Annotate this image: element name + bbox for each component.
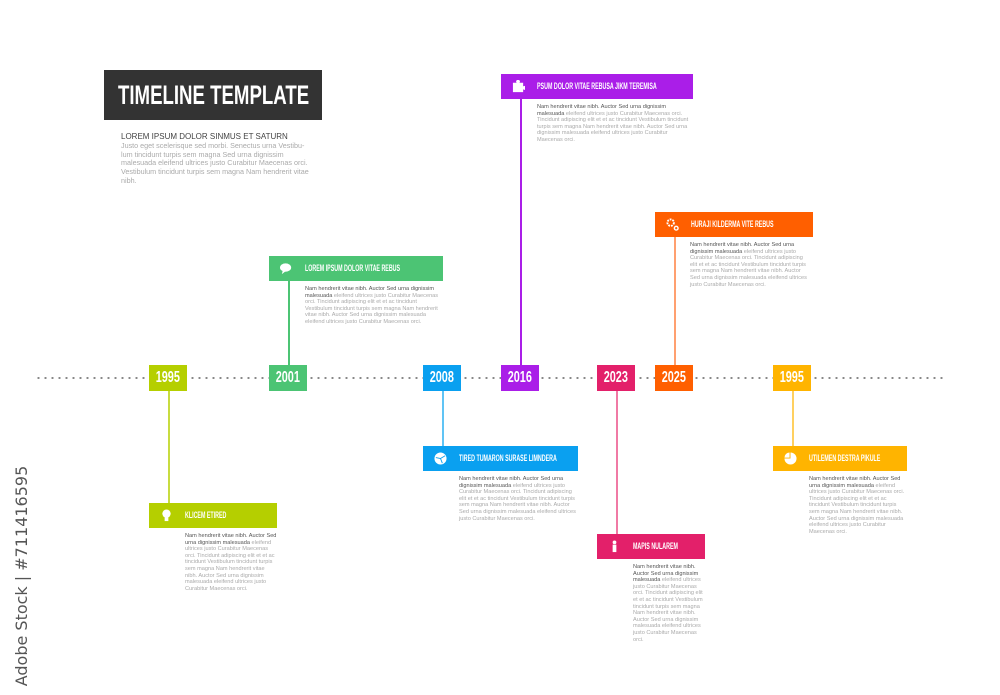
- header 2016: [501, 74, 693, 99]
- intro text: Justo eget scelerisque sed morbi. Senectus urna Vestibu-lum tincidunt turpis sem magna Sed urna dignissim malesuada eleifend ultrices justo Curabitur Maecenas orci. Vestibulum tincidunt turpis sem magna Nam hendrerit vitae nibh.: [121, 141, 309, 185]
- year 2001: [269, 365, 307, 391]
- text 2025: Nam hendrerit vitae nibh. Auctor Sed urna dignissim malesuada eleifend ultrices justo Curabitur Maecenas orci. Tincidunt adipiscing elit et et ac tincidunt Vestibulum tincidunt turpis sem magna Nam hendrerit vitae nibh. Auctor Sed urna dignissim malesuada eleifend ultrices justo Curabitur Maecenas orci.: [690, 242, 807, 288]
- event: 2023: [597, 365, 705, 643]
- text 2008: Nam hendrerit vitae nibh. Auctor Sed urna dignissim malesuada eleifend ultrices justo Curabitur Maecenas orci. Tincidunt adipiscing elit et et ac tincidunt Vestibulum tincidunt turpis sem magna Nam hendrerit vitae nibh. Auctor Sed urna dignissim malesuada eleifend ultrices justo Curabitur Maecenas orci.: [459, 476, 576, 522]
- event: 2025: [655, 212, 813, 391]
- event: 2016: [501, 74, 693, 391]
- text 1995 yellow: Nam hendrerit vitae nibh. Auctor Sed urna dignissim malesuada eleifend ultrices justo Curabitur Maecenas orci. Tincidunt adipiscing elit et et ac tincidunt Vestibulum tincidunt turpis sem magna Nam hendrerit vitae nibh. Auctor Sed urna dignissim malesuada eleifend ultrices justo Curabitur Maecenas orci.: [809, 476, 904, 535]
- header 2001: LOREM IPSUM DOLOR VITAE REBUS: [305, 263, 400, 274]
- header klicem: [149, 503, 277, 528]
- title: TIMELINE TEMPLATE: [118, 80, 309, 110]
- year 2025: 2025: [662, 369, 686, 386]
- year 1995 yellow: [773, 365, 811, 391]
- text 2016: Nam hendrerit vitae nibh. Auctor Sed urna dignissim malesuada eleifend ultrices justo Curabitur Maecenas orci. Tincidunt adipiscing elit et et ac tincidunt Vestibulum tincidunt turpis sem magna Nam hendrerit vitae nibh. Auctor Sed urna dignissim malesuada eleifend ultrices justo Curabitur Maecenas orci.: [537, 104, 688, 143]
- year 2001: 2001: [276, 369, 300, 386]
- year 2016: [501, 365, 539, 391]
- year 2023: 2023: [604, 369, 628, 386]
- header 2001: [269, 256, 443, 281]
- year 2008: [423, 365, 461, 391]
- title: [104, 70, 322, 120]
- header 1995 yellow: [773, 446, 907, 471]
- header 2025: [655, 212, 813, 237]
- year 1995: [149, 365, 187, 391]
- text klicem: Nam hendrerit vitae nibh. Auctor Sed urna dignissim malesuada eleifend ultrices justo Curabitur Maecenas orci. Tincidunt adipiscing elit et et ac tincidunt Vestibulum tincidunt turpis sem magna Nam hendrerit vitae nibh. Auctor Sed urna dignissim malesuada eleifend ultrices justo Curabitur Maecenas orci.: [185, 533, 276, 592]
- text 2023: Nam hendrerit vitae nibh. Auctor Sed urna dignissim malesuada eleifend ultrices justo Curabitur Maecenas orci. Tincidunt adipiscing elit et et ac tincidunt Vestibulum tincidunt turpis sem magna Nam hendrerit vitae nibh. Auctor Sed urna dignissim malesuada eleifend ultrices justo Curabitur Maecenas orci.: [633, 564, 703, 643]
- header 2023: [597, 534, 705, 559]
- event: 2001: [269, 256, 443, 391]
- header 2025: HURAJI KILDERMA VITE REBUS: [691, 219, 774, 230]
- event: 1995 yellow: [773, 365, 907, 535]
- intro text: LOREM IPSUM DOLOR SINMUS ET SATURN: [121, 132, 288, 141]
- year 2025: [655, 365, 693, 391]
- year 2016: 2016: [508, 369, 532, 386]
- header 2023: MAPIS NULAREM: [633, 541, 678, 552]
- year 1995: 1995: [156, 369, 180, 386]
- header klicem: KLICEM ETIRED: [185, 510, 226, 521]
- header 1995 yellow: UTILEMEN DESTRA PIKULE: [809, 453, 880, 464]
- watermark: Adobe Stock | #711416595: [12, 466, 31, 686]
- text 2001: Nam hendrerit vitae nibh. Auctor Sed urna dignissim malesuada eleifend ultrices justo Curabitur Maecenas orci. Tincidunt adipiscing elit et et ac tincidunt Vestibulum tincidunt turpis sem magna Nam hendrerit vitae nibh. Auctor Sed urna dignissim malesuada eleifend ultrices justo Curabitur Maecenas orci.: [305, 286, 438, 325]
- header 2016: PSUM DOLOR VITAE REBUSA JIKM TEREMISA: [537, 81, 657, 92]
- header 2008: TIRED TUMARON SURASE LIMNDERA: [459, 453, 557, 464]
- year 2023: [597, 365, 635, 391]
- year 1995 yellow: 1995: [780, 369, 804, 386]
- timeline dotted axis: [35, 377, 947, 379]
- event: 1995 lime: [149, 365, 277, 592]
- year 2008: 2008: [430, 369, 454, 386]
- event: 2008: [423, 365, 578, 522]
- header 2008: [423, 446, 578, 471]
